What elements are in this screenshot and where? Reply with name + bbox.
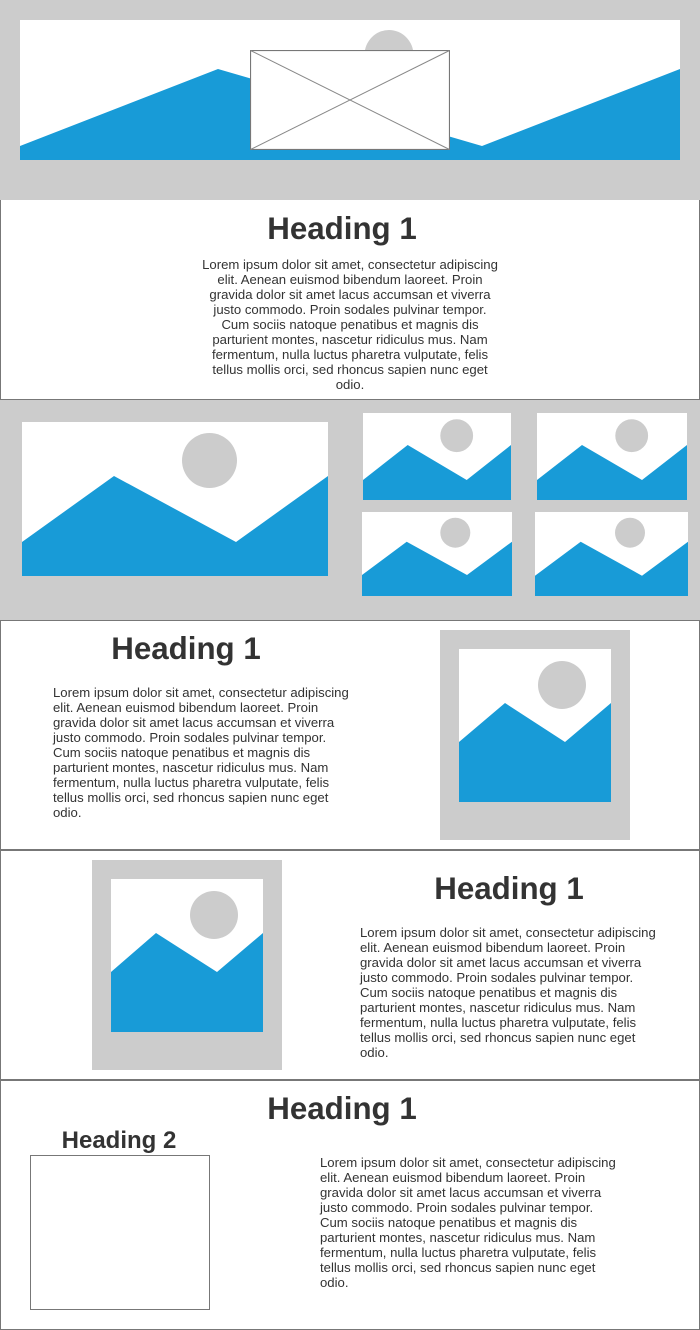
image placeholder: left landscape — [111, 879, 263, 1032]
text block: centered section: elit. Aenean euismod bibendum laoreet. Proin — [217, 272, 483, 287]
text block: centered section: Cum sociis natoque penatibus et magnis dis — [221, 317, 479, 332]
image: thumbnail bottom left — [362, 512, 512, 596]
text block: bottom section: fermentum, nulla luctus pharetra vulputate, felis — [320, 1245, 596, 1260]
heading: text-left section: Heading 1 — [111, 631, 261, 666]
text block: text-left section: gravida dolor sit amet lacus accumsan et viverra — [53, 715, 334, 730]
text block: text-left section: Cum sociis natoque penatibus et magnis dis — [53, 745, 310, 760]
wireframe box with crossed lines — [250, 50, 450, 150]
heading: centered section: Heading 1 — [267, 211, 417, 246]
image placeholder: right landscape — [459, 649, 611, 802]
text block: text-left section: parturient montes, nascetur ridiculus mus. Nam — [53, 760, 328, 775]
text block: bottom section: Lorem ipsum dolor sit amet, consectetur adipiscing — [320, 1155, 616, 1170]
heading: bottom section: Heading 1 — [267, 1091, 417, 1126]
text block: bottom section: tellus mollis orci, sed rhoncus sapien nunc eget — [320, 1260, 595, 1275]
panel: image left, text right — [0, 850, 700, 1080]
empty outlined box — [30, 1155, 210, 1310]
panel: text left, image right — [0, 620, 700, 850]
text block: text-left section: Lorem ipsum dolor sit amet, consectetur adipiscing — [53, 685, 349, 700]
image placeholder: hero landscape — [20, 20, 680, 160]
text block: text-right section: fermentum, nulla luctus pharetra vulputate, felis — [360, 1015, 636, 1030]
panel: image gallery — [0, 400, 700, 620]
image: large gallery landscape — [22, 422, 328, 576]
panel: centered text section — [0, 200, 700, 400]
text block: text-left section — [52, 685, 349, 820]
text block: text-right section: parturient montes, nascetur ridiculus mus. Nam — [360, 1000, 635, 1015]
image: thumbnail top left — [363, 413, 511, 500]
text block: centered section: odio. — [336, 377, 364, 392]
text block: text-left section: fermentum, nulla luctus pharetra vulputate, felis — [53, 775, 329, 790]
text block: centered section — [202, 257, 498, 392]
panel: hero banner — [0, 0, 700, 200]
text block: centered section: justo commodo. Proin sodales pulvinar tempor. — [213, 302, 487, 317]
text block: centered section: Lorem ipsum dolor sit amet, consectetur adipiscing — [202, 257, 498, 272]
heading: text-right section: Heading 1 — [434, 871, 584, 906]
text block: bottom section: gravida dolor sit amet lacus accumsan et viverra — [320, 1185, 601, 1200]
text block: text-left section: elit. Aenean euismod bibendum laoreet. Proin — [53, 700, 318, 715]
text block: text-right section — [360, 925, 656, 1060]
text block: text-left section: justo commodo. Proin sodales pulvinar tempor. — [53, 730, 326, 745]
text block: text-right section: elit. Aenean euismod bibendum laoreet. Proin — [360, 940, 625, 955]
text block: bottom section: justo commodo. Proin sodales pulvinar tempor. — [320, 1200, 593, 1215]
text block: bottom section: parturient montes, nascetur ridiculus mus. Nam — [320, 1230, 595, 1245]
image card: right — [440, 630, 630, 840]
text block: text-right section: Lorem ipsum dolor sit amet, consectetur adipiscing — [360, 925, 656, 940]
text block: text-right section: tellus mollis orci, sed rhoncus sapien nunc eget — [360, 1030, 635, 1045]
text block: text-right section: gravida dolor sit amet lacus accumsan et viverra — [360, 955, 641, 970]
text block: text-left section: odio. — [53, 805, 82, 820]
text block: text-right section: Cum sociis natoque penatibus et magnis dis — [360, 985, 617, 1000]
text block: bottom section: Cum sociis natoque penatibus et magnis dis — [320, 1215, 577, 1230]
text block: centered section: gravida dolor sit amet lacus accumsan et viverra — [209, 287, 491, 302]
image: thumbnail top right — [537, 413, 687, 500]
image card: left — [92, 860, 282, 1070]
text block: text-right section: justo commodo. Proin sodales pulvinar tempor. — [360, 970, 633, 985]
text block: centered section: tellus mollis orci, sed rhoncus sapien nunc eget — [212, 362, 488, 377]
heading: subsection: Heading 2 — [62, 1127, 176, 1154]
panel: bottom section — [0, 1080, 700, 1330]
image: thumbnail bottom right — [535, 512, 688, 596]
text block: bottom section: elit. Aenean euismod bibendum laoreet. Proin — [320, 1170, 585, 1185]
text block: text-left section: tellus mollis orci, sed rhoncus sapien nunc eget — [53, 790, 328, 805]
text block: bottom section — [320, 1155, 616, 1290]
text block: centered section: fermentum, nulla luctus pharetra vulputate, felis — [212, 347, 488, 362]
text block: bottom section: odio. — [320, 1275, 348, 1290]
text block: centered section: parturient montes, nascetur ridiculus mus. Nam — [212, 332, 488, 347]
text block: text-right section: odio. — [360, 1045, 388, 1060]
